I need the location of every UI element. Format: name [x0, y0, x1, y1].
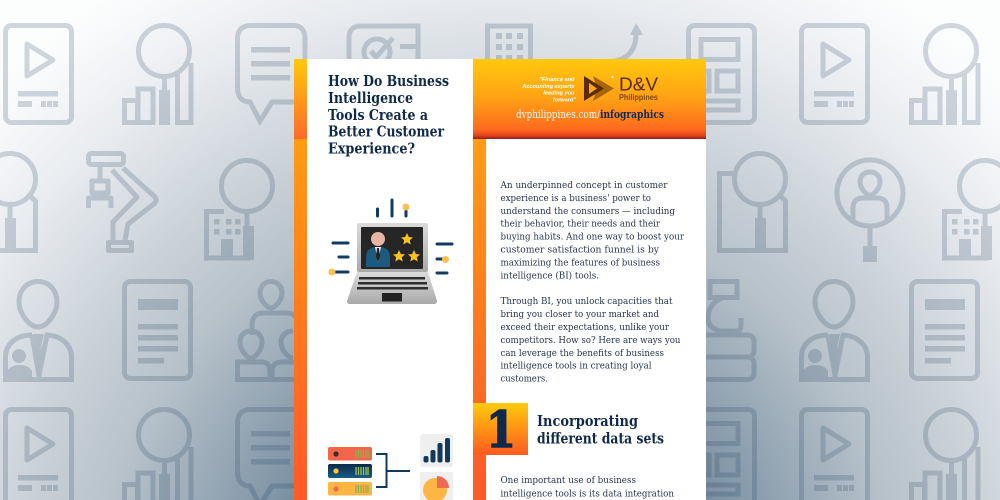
- section number: 1: [486, 400, 516, 459]
- panel: infographic page: [294, 59, 706, 500]
- second paragraph: exceed their expectations, unlike your: [500, 322, 670, 333]
- logo wordmark: [619, 74, 658, 102]
- laptop body: [347, 272, 437, 304]
- icon: video document bottom right: [802, 410, 868, 500]
- title: Tools Create a: [328, 107, 428, 124]
- website url: infographics: [600, 108, 664, 121]
- inner strip: [473, 139, 486, 500]
- customer portrait: [366, 232, 390, 267]
- logo wordmark: Philippines: [619, 93, 658, 102]
- header band: [473, 59, 706, 139]
- second paragraph: competitors. How so? Here are ways you: [500, 335, 681, 346]
- illustration: data integration: [328, 434, 453, 500]
- icon: robot arm: [88, 154, 156, 250]
- intro paragraph: experience is a business' power to: [500, 193, 651, 204]
- server navy: [328, 464, 372, 478]
- signal dots: [328, 204, 449, 276]
- icon: building magnifier right: [944, 160, 1000, 260]
- icon: group of people: [238, 282, 298, 380]
- icon: person left: [6, 282, 72, 382]
- icon: video document top right: [802, 26, 868, 122]
- icon: building top: [488, 26, 530, 76]
- icon: magnifier chart bottom: [124, 410, 191, 500]
- icon: document right: [912, 282, 978, 378]
- logo wordmark: D&V: [619, 74, 658, 94]
- section heading: Incorporating: [537, 412, 638, 430]
- icon: desk person right: [690, 282, 754, 380]
- signal rays: [333, 200, 452, 273]
- logo mark: [584, 76, 614, 101]
- icon: magnifier chart bottom right: [912, 410, 978, 500]
- logo tagline: forward": [553, 97, 576, 103]
- second paragraph: can leverage the benefits of business: [500, 348, 664, 359]
- icon: magnifier chart top: [124, 26, 191, 125]
- icon: magnifier document right: [720, 154, 786, 253]
- section number box: [473, 403, 528, 455]
- icon: layout document top right: [688, 26, 754, 122]
- logo tagline: "Finance and: [539, 77, 575, 83]
- second paragraph: bring you closer to your market and: [500, 309, 659, 320]
- icon: building magnifier: [206, 160, 272, 260]
- section heading: different data sets: [537, 430, 664, 448]
- intro paragraph: understand the consumers — including: [500, 206, 675, 217]
- intro paragraph: maximizing the features of business: [500, 258, 660, 268]
- server red: [328, 447, 372, 460]
- icon: person in magnifier: [837, 160, 903, 262]
- pie tile: [420, 472, 453, 500]
- icon: person right: [802, 282, 868, 382]
- logo tagline: leading you: [543, 91, 575, 97]
- icon: growth arrow top: [610, 23, 643, 62]
- laptop screen: [357, 223, 428, 272]
- keyboard: [357, 277, 428, 302]
- left strip lower: [294, 139, 307, 500]
- icon: layout document bottom right: [688, 410, 754, 500]
- icon: checklist top: [349, 26, 418, 70]
- section body text: intelligence tools is its data integration: [500, 488, 674, 500]
- title: Better Customer: [328, 124, 444, 140]
- second paragraph: intelligence tools in creating loyal: [500, 360, 652, 372]
- second paragraph: customers.: [500, 374, 548, 384]
- chart tile: [420, 434, 453, 467]
- illustration: laptop with customer rating: [328, 200, 452, 304]
- title: Intelligence: [328, 90, 413, 107]
- title: How Do Business: [328, 73, 449, 90]
- website url: dvphilippines.com/: [516, 108, 600, 121]
- icon: video document top left: [6, 26, 72, 122]
- server orange: [328, 482, 372, 496]
- section body text: One important use of business: [500, 475, 636, 486]
- intro paragraph: An underpinned concept in customer: [500, 180, 668, 191]
- connector bracket: [376, 454, 410, 487]
- intro paragraph: their behavior, their needs and their: [500, 218, 661, 230]
- icon: magnifier chart top right: [912, 26, 978, 125]
- left strip upper: [294, 59, 307, 139]
- icon: video document bottom left: [6, 410, 72, 500]
- icon: document left: [124, 282, 190, 378]
- intro paragraph: intelligence (BI) tools.: [500, 270, 599, 282]
- intro paragraph: customer satisfaction funnel is by: [500, 244, 660, 256]
- intro paragraph: buying habits. And one way to boost your: [500, 232, 685, 242]
- icon: magnifier document left: [0, 154, 36, 253]
- website url: [516, 108, 664, 121]
- title: Experience?: [328, 140, 415, 158]
- icon: speech bubble top: [238, 26, 305, 121]
- second paragraph: Through BI, you unlock capacities that: [500, 296, 673, 307]
- logo tagline: Accounting experts: [521, 84, 574, 90]
- icon: speech bubble bottom: [238, 410, 305, 500]
- rating stars: [393, 233, 420, 262]
